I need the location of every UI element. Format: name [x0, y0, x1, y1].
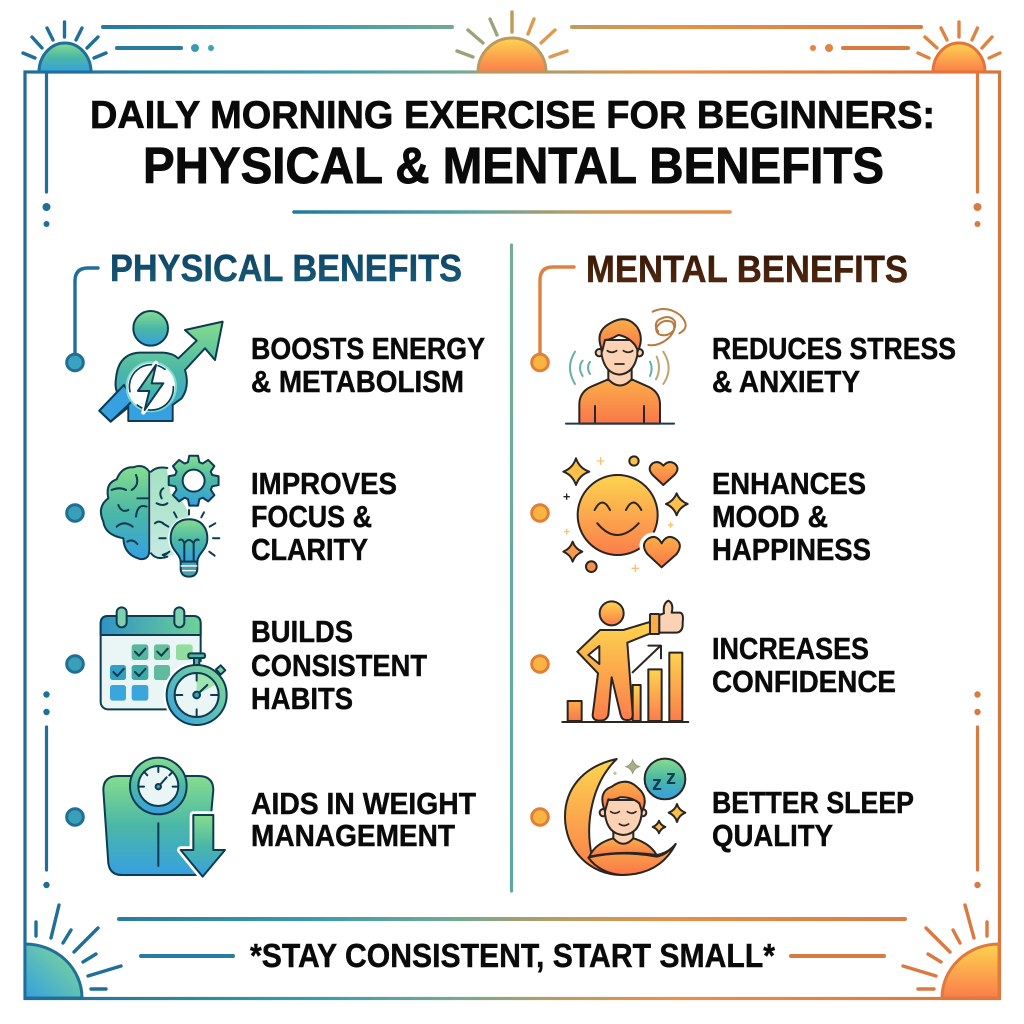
text: improves focus and clarity: CLARITY: [251, 532, 368, 567]
title: PHYSICAL & MENTAL BENEFITS: [143, 137, 884, 194]
panel: mental benefits: [532, 249, 956, 875]
heading: mental benefits: MENTAL BENEFITS: [586, 249, 908, 291]
border dots: [42, 44, 982, 888]
text: enhances mood and happiness: MOOD &: [712, 499, 828, 534]
icon: confident figure with thumbs up and rising bars: [562, 601, 688, 722]
text: better sleep quality: BETTER SLEEP: [712, 785, 914, 820]
icon: weighing scale with down arrow: [103, 758, 225, 877]
text: enhances mood and happiness: [712, 466, 871, 567]
icon: person with energy bolt and rising arrow: [99, 311, 223, 422]
footer tagline: *STAY CONSISTENT, START SMALL*: [250, 937, 775, 974]
icon: sun bottom right: [903, 905, 999, 998]
text: reduces stress and anxiety: REDUCES STRESS: [712, 331, 956, 366]
text: increases confidence: INCREASES: [712, 631, 869, 666]
title underline: [294, 210, 730, 214]
text: improves focus and clarity: FOCUS &: [251, 499, 372, 534]
text: builds consistent habits: HABITS: [251, 681, 353, 716]
icon: calendar and stopwatch: [101, 607, 230, 728]
icon: sun top left: [23, 22, 106, 72]
text: aids in weight management: [251, 786, 476, 853]
text: aids in weight management: AIDS IN WEIGHT: [251, 786, 476, 821]
text: better sleep quality: QUALITY: [712, 818, 833, 853]
icon: sun bottom left: [25, 905, 121, 998]
text: improves focus and clarity: IMPROVES: [251, 466, 397, 501]
text: boosts energy and metabolism: & METABOLISM: [251, 364, 464, 399]
heading: physical benefits: PHYSICAL BENEFITS: [110, 248, 462, 290]
text: builds consistent habits: CONSISTENT: [251, 648, 427, 683]
text: enhances mood and happiness: ENHANCES: [712, 466, 866, 501]
text: enhances mood and happiness: HAPPINESS: [712, 532, 871, 567]
icon: sleeping person on crescent moon: z: [666, 767, 676, 789]
text: better sleep quality: [712, 785, 914, 853]
text: improves focus and clarity: [251, 466, 397, 567]
column divider: [510, 245, 513, 891]
text: boosts energy and metabolism: [251, 331, 485, 399]
panel: physical benefits: [67, 248, 485, 877]
text: reduces stress and anxiety: & ANXIETY: [712, 364, 860, 399]
icon: sun top centre: [457, 12, 567, 72]
text: increases confidence: CONFIDENCE: [712, 664, 896, 699]
icon: sleeping person on crescent moon: [565, 759, 685, 875]
text: increases confidence: [712, 631, 896, 699]
icon: sleeping person on crescent moon: z: [652, 773, 662, 795]
text: reduces stress and anxiety: [712, 331, 956, 399]
text: boosts energy and metabolism: BOOSTS ENERGY: [251, 331, 485, 366]
icon: smiley face with hearts and sparkles: [563, 456, 688, 572]
title: [90, 94, 935, 194]
text: builds consistent habits: BUILDS: [251, 614, 353, 649]
text: builds consistent habits: [251, 614, 427, 716]
title: DAILY MORNING EXERCISE FOR BEGINNERS:: [90, 94, 935, 137]
bracket connector and bullets: [532, 267, 574, 825]
text: aids in weight management: MANAGEMENT: [251, 818, 455, 853]
icon: brain with gear and lightbulb: [101, 456, 219, 577]
bracket connector and bullets: [67, 268, 98, 825]
icon: sun top right: [918, 22, 1000, 72]
icon: calm person with stress spiral: [566, 309, 686, 424]
